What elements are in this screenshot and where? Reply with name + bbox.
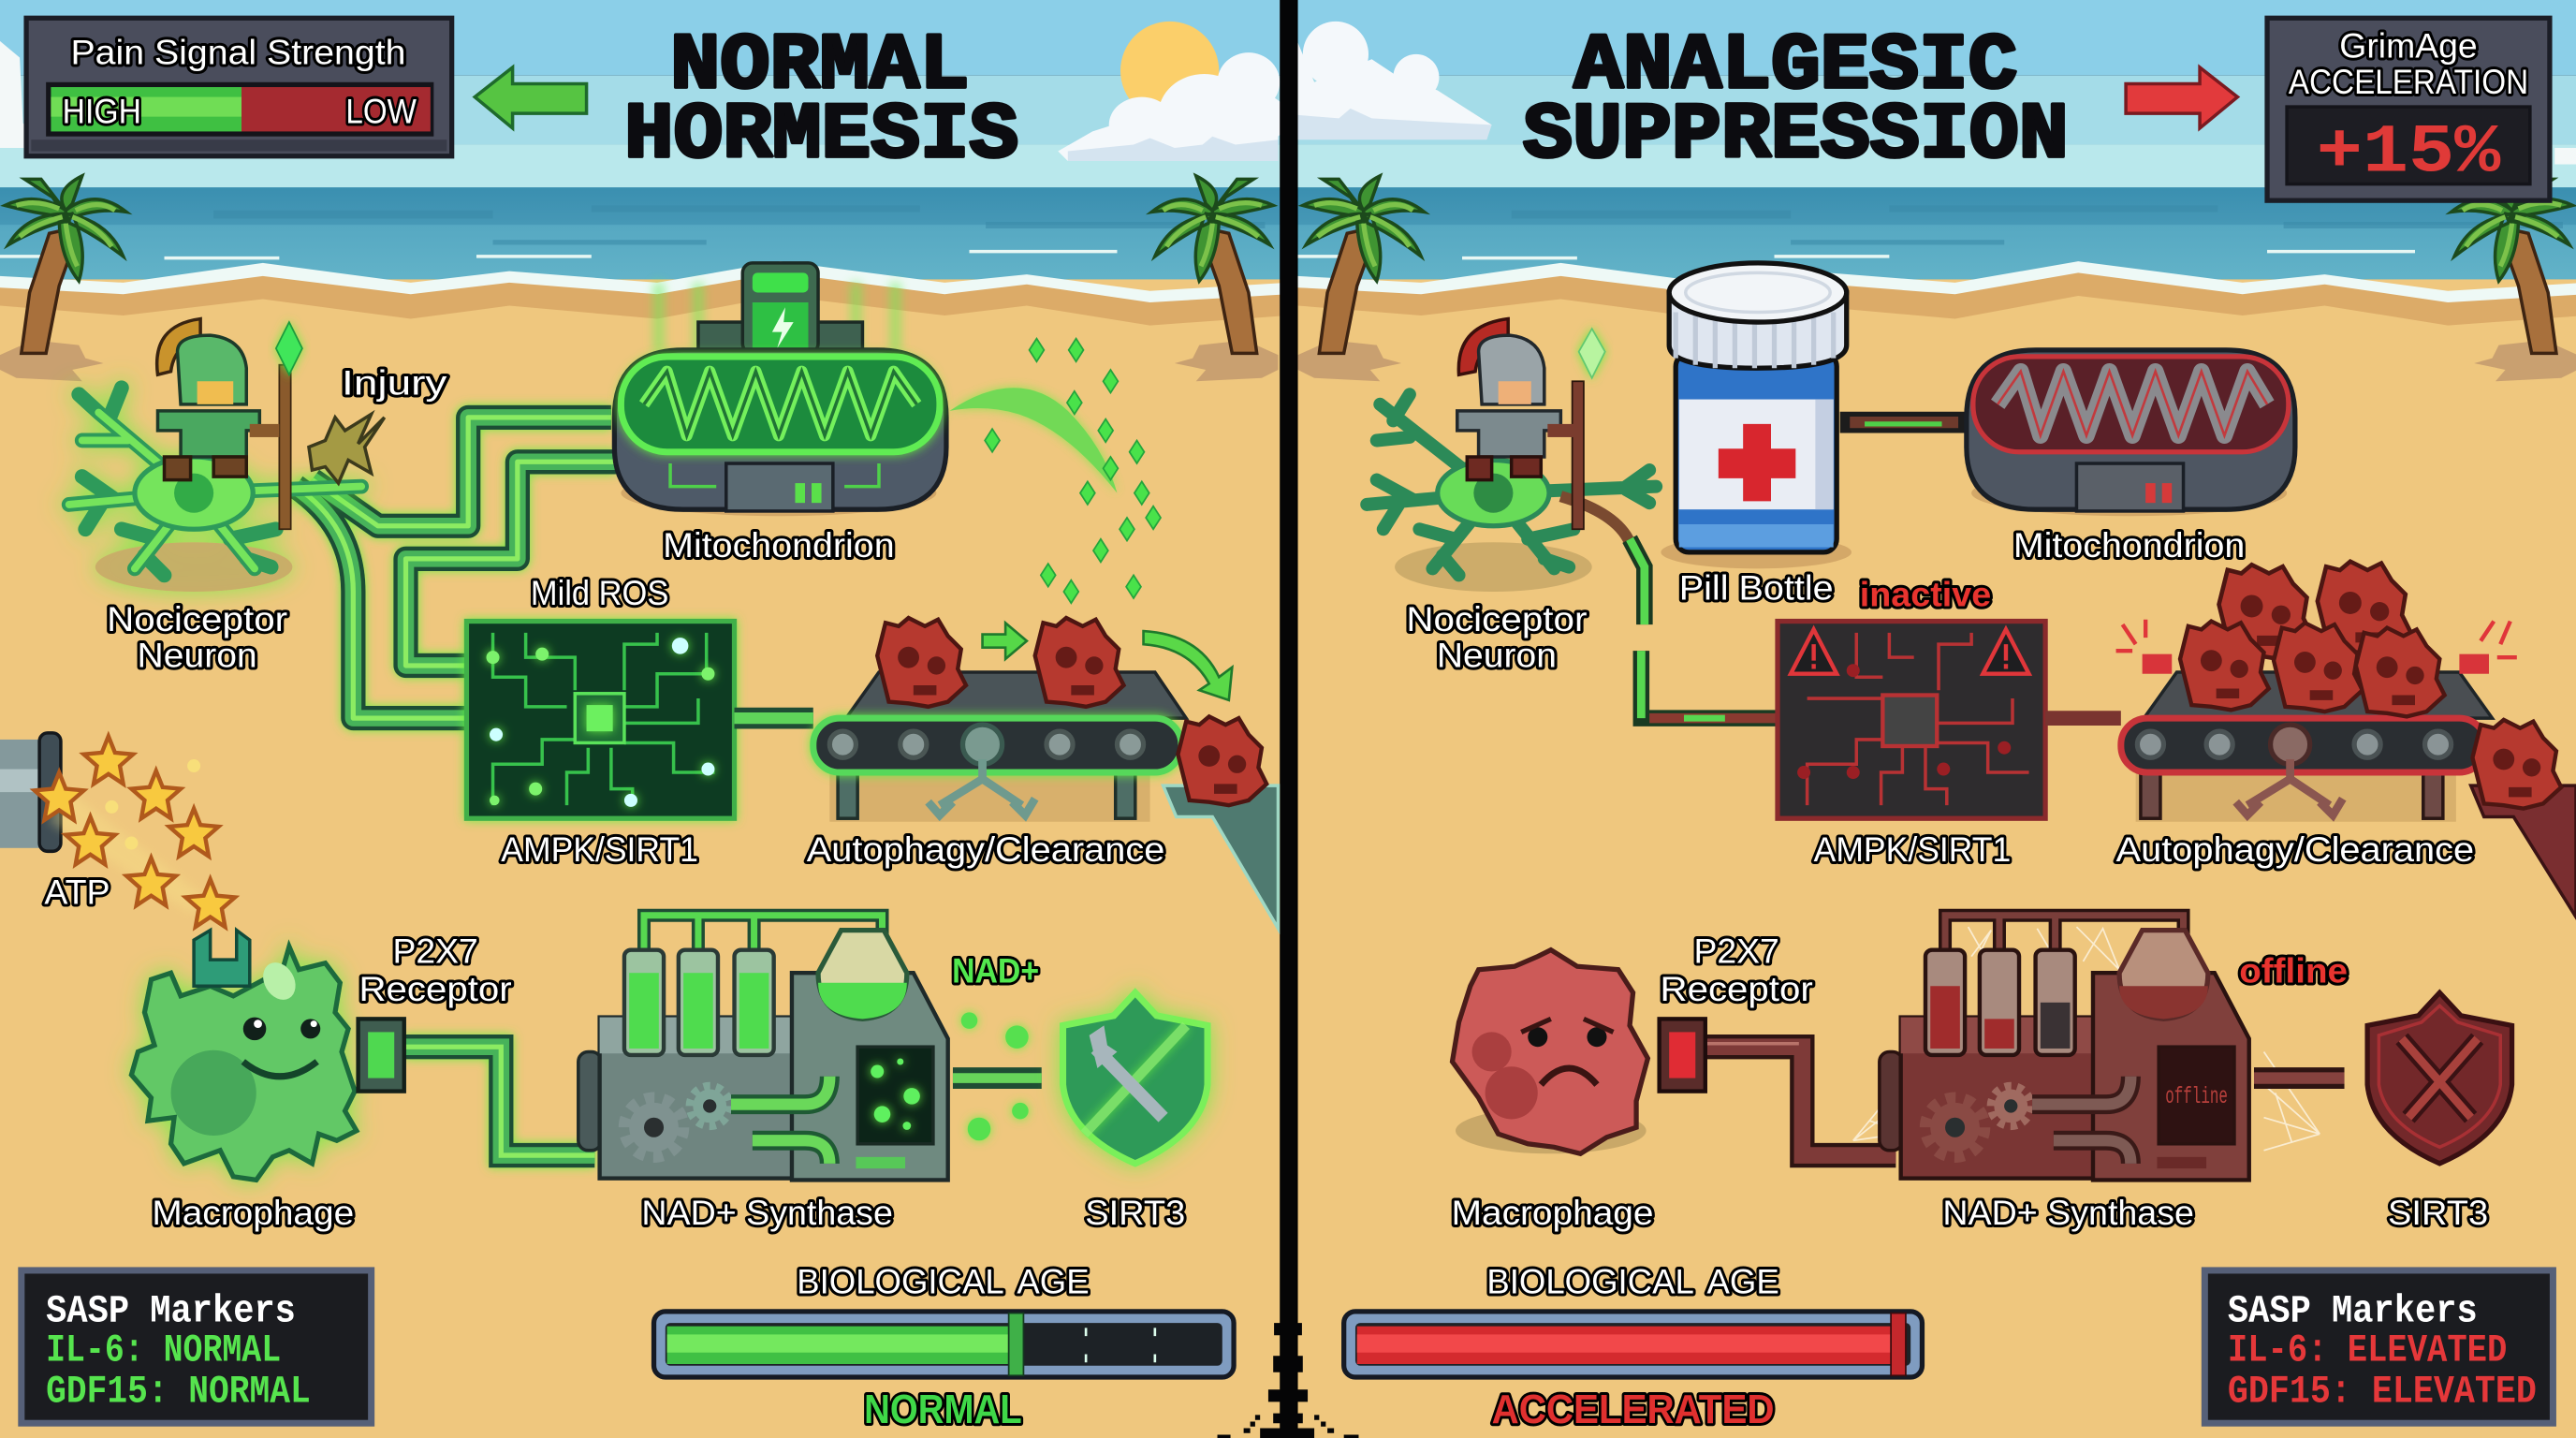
label: nad synthase left: NAD+ Synthase [641,1194,893,1232]
label: p2x7 receptor left [359,932,512,1008]
panel: sasp markers right [2204,1270,2553,1423]
arrow: red right [2126,67,2237,128]
panel: grimage acceleration: ACCELERATION [2289,63,2528,101]
knight: right [1457,319,1605,529]
chip: ampk sirt1 right [1778,622,2045,818]
label: nociceptor neuron left: Nociceptor [107,600,287,638]
+15% value: +15% [2317,115,2501,193]
atp stars [35,736,235,927]
panel: sasp markers left [22,1270,372,1423]
label: p2x7 receptor right: P2X7 [1694,932,1779,971]
palm tree: right panel right [2452,176,2576,381]
panel: sasp markers right: SASP Markers [2228,1288,2478,1333]
panel: sasp markers left: GDF15: NORMAL [46,1369,311,1414]
panel: pain signal strength: LOW [345,93,417,131]
palm tree: right panel left [1298,176,1425,381]
warning triangle [1791,629,1837,674]
panel: sasp markers left: IL-6: NORMAL [46,1328,281,1372]
mitochondrion: left [614,263,946,516]
biological age bar left: BIOLOGICAL AGE [797,1263,1090,1301]
title: analgesic suppression: SUPPRESSION [1523,92,2069,181]
screen offline text: offline [2165,1085,2228,1110]
pipe: broken neuron signal [1630,539,1778,718]
warning triangle [1983,629,2029,674]
label: nad plus: NAD+ [952,952,1039,990]
pill bottle [1661,263,1852,568]
title: analgesic suppression: ANALGESIC [1573,22,2017,111]
label: sirt3 right: SIRT3 [2388,1194,2488,1232]
spiky injury object [309,414,385,483]
label: ampk sirt1 left: AMPK/SIRT1 [501,830,698,869]
conveyor: autophagy right [2121,654,2492,822]
damaged cell: left first [877,618,966,707]
title: analgesic suppression [1523,22,2069,181]
label: offline: offline [2239,952,2348,990]
label: nad synthase right: NAD+ Synthase [1942,1194,2194,1232]
damaged cell: in left bin [1178,716,1266,805]
biological age bar left [654,1263,1234,1377]
panel: grimage acceleration: GrimAge [2339,26,2478,65]
shield: sirt3 damaged [2367,992,2512,1164]
bin: right [2471,785,2576,917]
neuron: left nociceptor [69,388,361,592]
biological age bar right: BIOLOGICAL AGE [1486,1263,1779,1301]
title: normal hormesis [624,22,1018,181]
conveyor: autophagy left [813,672,1186,822]
label: p2x7 receptor left: Receptor [359,970,512,1008]
palm tree: left panel left [0,176,126,381]
label: pill bottle: Pill Bottle [1679,569,1834,608]
arrow: green left [475,67,587,128]
nad dots [961,1012,1029,1140]
alarm ticks [2116,620,2517,657]
sparkles: ros stream [949,339,1161,603]
pipe: right chip to conveyor [2045,714,2121,723]
label: atp: ATP [44,873,110,911]
damaged cell: left second [1035,618,1123,707]
label: inactive: inactive [1860,576,1991,614]
palm tree: left panel right [1151,176,1278,381]
cloud: left panel right [1058,52,1288,161]
label: nociceptor neuron right: Nociceptor [1406,600,1587,638]
label: nociceptor neuron right [1406,600,1587,675]
label: nociceptor neuron left [107,600,287,675]
pipe: receptor to synthase left [404,1047,594,1155]
macrophage: damaged [1453,950,1647,1153]
panel: sasp markers right: IL-6: ELEVATED [2228,1328,2507,1372]
damaged cell: in right bin [2472,720,2561,809]
panel: sasp markers right: GDF15: ELEVATED [2228,1369,2537,1414]
label: mild ros: Mild ROS [531,574,668,612]
machine: nad synthase left [578,916,948,1180]
background: left beach [0,0,1288,1438]
pipe: receptor to synthase right [1705,1044,1895,1155]
bin: left [1164,785,1278,929]
pipes: left signal network [296,418,616,718]
mitochondrion: right [1967,350,2295,516]
pile of damaged cells [2180,562,2445,716]
neuron: right nociceptor [1367,394,1656,592]
label: mitochondrion right: Mitochondrion [2013,526,2245,565]
pipe: synthase to shield right [2254,1072,2345,1084]
panel: pain signal strength [26,18,452,156]
label: p2x7 receptor right: Receptor [1661,970,1813,1008]
chip: ampk sirt1 left [466,622,735,818]
label: nociceptor neuron right: Neuron [1437,637,1557,675]
cobwebs around machine [1853,927,2320,1151]
cloud: right panel edge [2554,148,2576,165]
receptor: right [1660,1019,1705,1092]
pipe: bottle to mitochondrion [1840,422,1969,424]
title: normal hormesis: NORMAL [670,22,970,111]
label: ampk sirt1 right: AMPK/SIRT1 [1814,830,2011,869]
sun [1120,22,1219,120]
label: injury: Injury [342,363,447,402]
pipe: chip to conveyor [735,712,813,725]
receptor: left [359,1019,404,1092]
pain bar labels: HIGH [63,93,141,131]
label: p2x7 receptor right [1661,932,1813,1008]
label: macrophage right: Macrophage [1452,1194,1654,1232]
background: right beach [1297,0,2576,1438]
status: normal: NORMAL [864,1387,1022,1432]
pipe: synthase to shield [953,1072,1042,1084]
label: autophagy clearance left: Autophagy/Clearance [807,830,1164,869]
label: mitochondrion left: Mitochondrion [663,526,895,565]
biological age bar right [1344,1263,1922,1377]
cloud: right panel left [1298,22,1492,139]
knight: left [157,319,302,529]
arrow: curved to bin [1144,631,1232,700]
macrophage: healthy [131,931,357,1180]
label: nociceptor neuron left: Neuron [138,637,257,675]
title: normal hormesis: HORMESIS [624,92,1018,181]
status: accelerated: ACCELERATED [1492,1387,1775,1432]
label: macrophage left: Macrophage [152,1194,354,1232]
panel: sasp markers left: SASP Markers [46,1288,296,1333]
pain signal title: Pain Signal Strength [70,33,406,71]
arrow: cell transition [983,623,1027,659]
machine: nad synthase right [1880,916,2249,1180]
shield: sirt3 healthy [1063,992,1208,1164]
cloud: left panel edge [0,41,46,148]
label: autophagy clearance right: Autophagy/Clearance [2116,830,2474,869]
panel: grimage acceleration [2267,18,2550,200]
pill bottle cross [1719,424,1795,501]
divider [1218,0,1358,1438]
atp cannon [0,733,61,851]
label: sirt3 left: SIRT3 [1085,1194,1185,1232]
label: p2x7 receptor left: P2X7 [392,932,478,971]
